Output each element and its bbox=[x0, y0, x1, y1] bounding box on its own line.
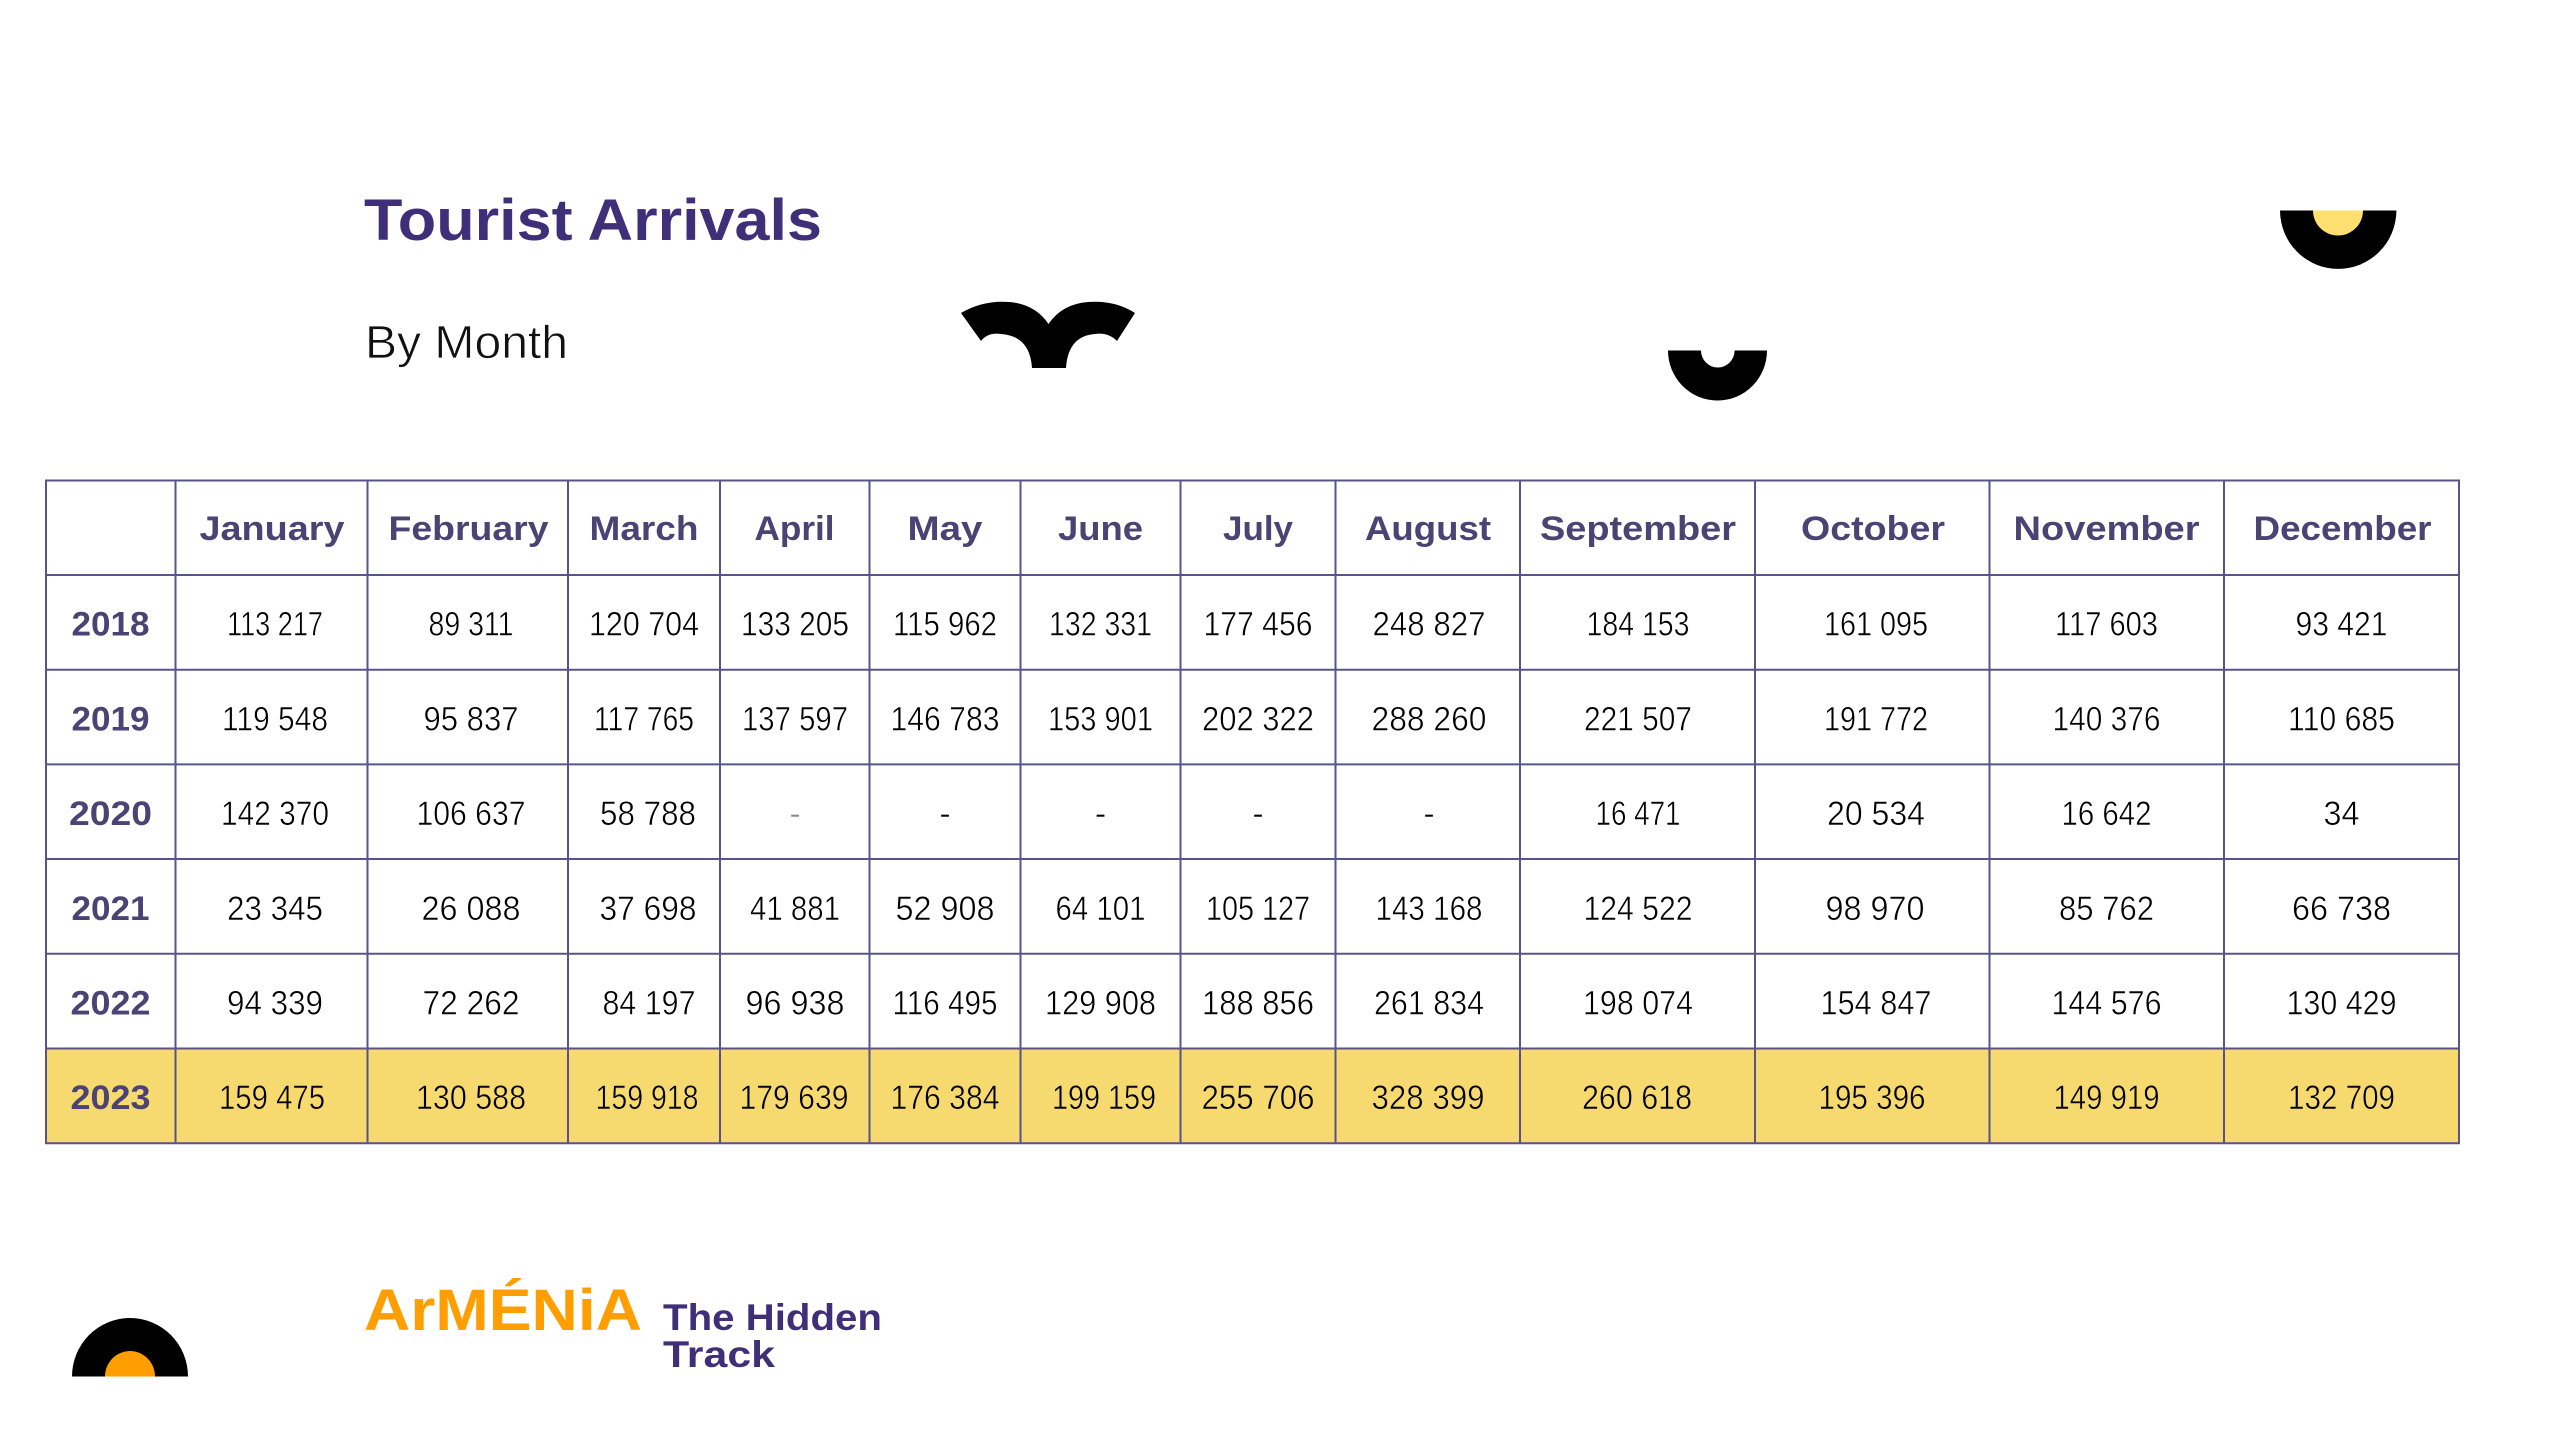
icon: half disc with yellow centre bbox=[2280, 210, 2396, 269]
table header: months: February bbox=[388, 510, 549, 548]
row: 2020: 16 642 bbox=[2062, 795, 2152, 833]
row: 2021: 66 738 bbox=[2292, 890, 2391, 928]
logo tagline: The Hidden Track bbox=[663, 1297, 882, 1375]
row: 2019: 221 507 bbox=[1584, 700, 1692, 738]
row: 2021: 98 970 bbox=[1826, 890, 1924, 928]
row: 2019: 95 837 bbox=[424, 700, 518, 738]
row: 2022: 130 429 bbox=[2286, 984, 2396, 1022]
row: 2023 highlighted: 255 706 bbox=[1202, 1079, 1314, 1117]
row: 2021: 85 762 bbox=[2059, 890, 2154, 928]
row: 2018: 248 827 bbox=[1372, 606, 1486, 644]
icon: half disc with orange centre bbox=[72, 1318, 188, 1376]
logo: Armenia wordmark: ArMÉNiA bbox=[364, 1278, 642, 1343]
row: 2022 bbox=[70, 984, 2396, 1022]
row: 2020: 34 bbox=[2324, 795, 2360, 833]
row: 2021: 52 908 bbox=[896, 890, 994, 928]
row: 2021: 23 345 bbox=[227, 890, 323, 928]
row: 2021: 124 522 bbox=[1584, 890, 1692, 928]
row: 2023 highlighted bbox=[70, 1079, 2395, 1117]
row: 2021: 26 088 bbox=[422, 890, 520, 928]
row: 2019: 191 772 bbox=[1824, 700, 1928, 738]
row: 2020: - bbox=[789, 795, 801, 833]
row: 2019: 110 685 bbox=[2288, 700, 2395, 738]
row: 2019: 119 548 bbox=[222, 700, 328, 738]
row: 2021: 64 101 bbox=[1056, 890, 1146, 928]
row: 2023 highlighted: 195 396 bbox=[1818, 1079, 1926, 1117]
table: tourist arrivals by month bbox=[45, 480, 2460, 1144]
row: 2019: 137 597 bbox=[742, 700, 848, 738]
table header: months: May bbox=[908, 510, 983, 548]
row: 2022: 188 856 bbox=[1202, 984, 1314, 1022]
row: 2021: 105 127 bbox=[1206, 890, 1310, 928]
row: 2023 highlighted: 130 588 bbox=[416, 1079, 526, 1117]
icon: black bird shape bbox=[961, 302, 1135, 368]
row: 2023 highlighted: 2023 bbox=[70, 1079, 150, 1117]
table header: months: December bbox=[2254, 510, 2432, 548]
row: 2021 bbox=[72, 890, 2391, 928]
row: 2022: 129 908 bbox=[1045, 984, 1156, 1022]
table header: months: September bbox=[1540, 510, 1736, 548]
row: 2018: 161 095 bbox=[1824, 606, 1928, 644]
row: 2018: 120 704 bbox=[589, 606, 699, 644]
table header: months: August bbox=[1365, 510, 1491, 548]
row: 2020: 58 788 bbox=[600, 795, 696, 833]
table header: months bbox=[200, 510, 2432, 548]
row: 2021: 2021 bbox=[72, 890, 150, 928]
row: 2020: 16 471 bbox=[1596, 795, 1680, 833]
table header: months: March bbox=[590, 510, 698, 548]
row: 2023 highlighted: 260 618 bbox=[1582, 1079, 1692, 1117]
row: 2020: - bbox=[939, 795, 951, 833]
logo tagline: The Hidden Track: The Hidden bbox=[663, 1297, 882, 1338]
row: 2021: 143 168 bbox=[1376, 890, 1482, 928]
logo tagline: The Hidden Track: Track bbox=[663, 1334, 775, 1375]
row: 2018: 113 217 bbox=[227, 606, 323, 644]
subtitle: By Month bbox=[365, 316, 568, 368]
row: 2022: 72 262 bbox=[422, 984, 520, 1022]
row: 2022: 94 339 bbox=[227, 984, 323, 1022]
row: 2018: 184 153 bbox=[1586, 606, 1690, 644]
row: 2020: 142 370 bbox=[221, 795, 329, 833]
row: 2018: 2018 bbox=[72, 606, 150, 644]
row: 2018: 133 205 bbox=[741, 606, 849, 644]
row: 2020: 106 637 bbox=[416, 795, 526, 833]
row: 2019: 288 260 bbox=[1372, 700, 1486, 738]
row: 2018: 117 603 bbox=[2055, 606, 2158, 644]
row: 2023 highlighted: 176 384 bbox=[890, 1079, 1000, 1117]
row: 2019 bbox=[72, 700, 2395, 738]
row: 2022: 96 938 bbox=[746, 984, 844, 1022]
row: 2023 highlighted: 149 919 bbox=[2054, 1079, 2160, 1117]
row: 2020: - bbox=[1252, 795, 1264, 833]
row: 2020: 2020 bbox=[69, 795, 152, 833]
row: 2020: - bbox=[1095, 795, 1106, 833]
row: 2022: 261 834 bbox=[1374, 984, 1484, 1022]
row: 2018: 89 311 bbox=[428, 606, 514, 644]
row: 2019: 140 376 bbox=[2052, 700, 2160, 738]
row: 2023 highlighted: 132 709 bbox=[2288, 1079, 2395, 1117]
row: 2022: 154 847 bbox=[1820, 984, 1932, 1022]
row: 2023 highlighted: 199 159 bbox=[1052, 1079, 1156, 1117]
row: 2018: 132 331 bbox=[1049, 606, 1152, 644]
row: 2019: 153 901 bbox=[1048, 700, 1153, 738]
row: 2020: 20 534 bbox=[1827, 795, 1925, 833]
table header: months: January bbox=[200, 510, 345, 548]
row: 2022: 116 495 bbox=[892, 984, 998, 1022]
title: Tourist Arrivals bbox=[364, 188, 822, 253]
row: 2022: 2022 bbox=[70, 984, 150, 1022]
row: 2019: 117 765 bbox=[594, 700, 694, 738]
row: 2023 highlighted: 159 918 bbox=[596, 1079, 698, 1117]
row: 2023 highlighted: 328 399 bbox=[1372, 1079, 1484, 1117]
row: 2022: 84 197 bbox=[602, 984, 696, 1022]
row: 2019: 146 783 bbox=[890, 700, 1000, 738]
icon: half disc with white centre bbox=[1668, 350, 1767, 400]
row: 2018 bbox=[72, 606, 2388, 644]
table header: months: July bbox=[1223, 510, 1293, 548]
row: 2022: 198 074 bbox=[1583, 984, 1693, 1022]
row: 2019: 202 322 bbox=[1202, 700, 1314, 738]
row: 2020: - bbox=[1423, 795, 1435, 833]
row: 2021: 41 881 bbox=[750, 890, 840, 928]
row: 2023 highlighted: 159 475 bbox=[219, 1079, 325, 1117]
row: 2018: 115 962 bbox=[893, 606, 997, 644]
table header: months: April bbox=[754, 510, 834, 548]
table header: months: November bbox=[2014, 510, 2200, 548]
row: 2019: 2019 bbox=[72, 700, 150, 738]
table header: months: October bbox=[1801, 510, 1945, 548]
row: 2022: 144 576 bbox=[2052, 984, 2162, 1022]
table header: months: June bbox=[1058, 510, 1143, 548]
row: 2023 highlighted: 179 639 bbox=[740, 1079, 848, 1117]
row: 2018: 93 421 bbox=[2296, 606, 2388, 644]
row: 2021: 37 698 bbox=[600, 890, 696, 928]
row: 2018: 177 456 bbox=[1204, 606, 1312, 644]
row: 2020 bbox=[69, 795, 2360, 833]
